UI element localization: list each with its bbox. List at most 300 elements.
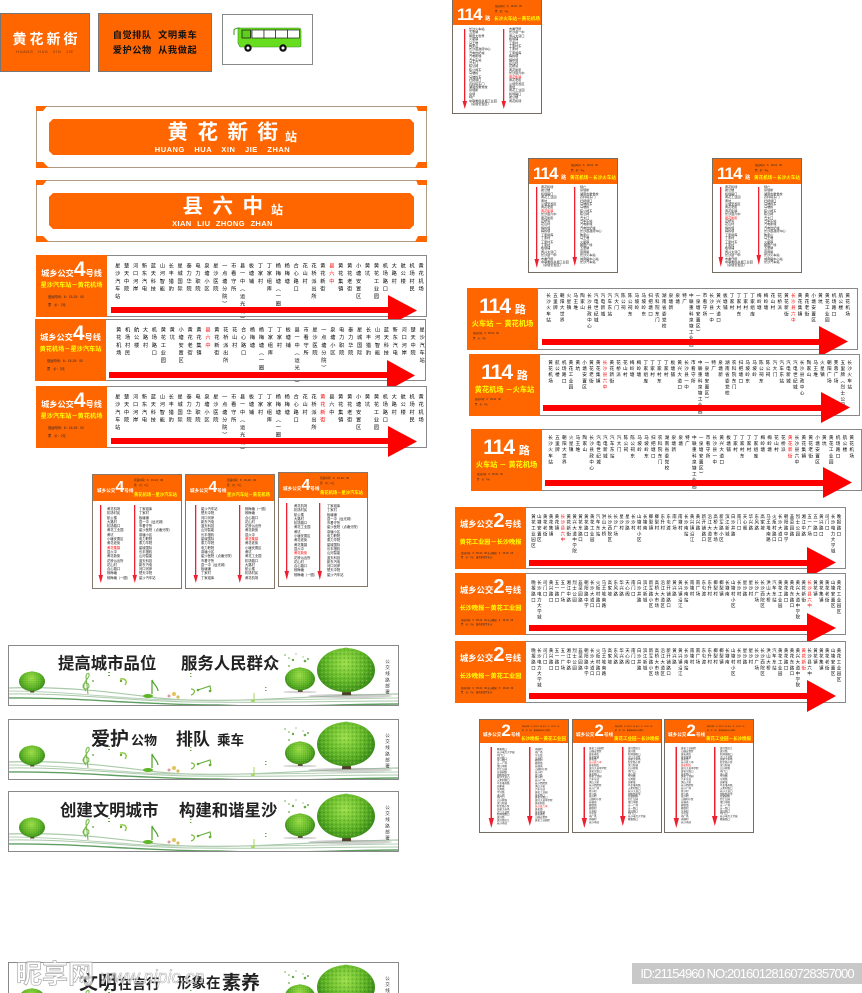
stop list: 机场路口 — [382, 394, 388, 424]
stops column 2: 长沙大道口 — [628, 790, 641, 793]
stop list: 汽电新城 — [786, 360, 791, 384]
direction: 黄花机场－星沙汽车站 — [40, 346, 101, 353]
stops column 2: 扫把塘口 — [580, 199, 592, 203]
line name: 城乡公交2号线 — [668, 721, 705, 740]
stop list: 板塘铺 — [727, 435, 732, 453]
stops column 1: 黄花集镇 — [589, 756, 599, 759]
stops column 2: 长沙村 — [535, 771, 543, 774]
stop list: 花山村 — [774, 435, 779, 453]
stop list: 河口河岸 — [132, 394, 138, 424]
fare: 票 价：2元 — [475, 404, 488, 406]
route title block — [467, 288, 538, 350]
stops column 1: 丁家组库 — [725, 233, 737, 237]
stop list: 黄坑 — [818, 293, 823, 305]
stops column 2: 蓝天科技 — [139, 559, 152, 563]
issuer text: 公交线路部署 — [386, 733, 390, 770]
stop list: 新东汽电 — [141, 263, 147, 293]
stops column 1: 五一广场 — [497, 762, 507, 765]
stops column 2: 航公楼 — [509, 95, 518, 99]
stops column 1: 黄坑 — [541, 199, 547, 203]
stops column 1: 黄坑 — [107, 533, 114, 537]
stops column 2: 高家坡 — [628, 781, 636, 784]
stops column 1: 长沙县六中 — [589, 761, 602, 764]
stop list: 韭菜园路 — [578, 580, 583, 603]
stop list: 黄兴镇沿江 — [678, 580, 683, 609]
hours and fare: 营运时间：6：05-19：00 长沙：6：15-19：00 — [522, 726, 559, 728]
stops column 2: 白沙井路 — [720, 767, 730, 770]
stop list: 黄花工业园区 — [531, 514, 536, 549]
stop list: 机场村民 — [409, 263, 415, 293]
stops column 2: 河口河岸 — [139, 567, 152, 571]
stop list: 湖南省委党校 — [725, 360, 730, 397]
stop list: 黄花工业园 — [829, 435, 834, 466]
stop list: 丁家村东 — [657, 360, 662, 384]
stop list: 山河智能 — [159, 263, 165, 293]
arrows: direction — [98, 505, 137, 583]
line name: 城乡公交4号线 — [41, 389, 102, 412]
stop list: 榔梨村 — [655, 514, 660, 531]
stop list: 机场路口 — [562, 360, 567, 384]
stop list: 南塘村 — [678, 514, 683, 531]
stop list: 市看守所 — [691, 360, 696, 384]
stop list: 电力职院 — [194, 394, 200, 424]
stop list: 长沙广场 — [614, 514, 619, 537]
stops column 1: 黄花工业园 — [541, 195, 556, 199]
stop list: 汽车东站 — [772, 648, 777, 671]
stops column 1: 高桥大市场 — [497, 808, 510, 811]
stops column 2: 梅岭塘 — [509, 58, 518, 62]
stops column 1: 南广场 — [589, 815, 597, 818]
stop list: 黄花东路口 — [790, 580, 795, 609]
stop list: 高家坡 — [608, 648, 613, 665]
hours and fare: 票 价：2元 黄花新街至长沙： — [461, 624, 494, 626]
stop list: 黄兴路口 — [819, 514, 824, 537]
stop list: 白沙井路 — [731, 514, 736, 537]
stop list: 晚报路口 — [837, 514, 842, 537]
stops column 2: 汽电新城 — [764, 222, 776, 226]
stop list: 黄花工业园 — [590, 514, 595, 543]
stop list: 星沙医院 — [212, 394, 218, 424]
stop list: 航公楼 — [400, 394, 406, 417]
stops column 2: 汽大门 — [580, 216, 589, 220]
stops column 2: 南塘村 — [535, 748, 543, 751]
stop list: 长塘南 — [725, 648, 730, 665]
hours and fare: 票 价：2元 — [571, 169, 584, 172]
stops column 2: 丁家村 — [509, 47, 518, 51]
stop list: 蓝天科技 — [150, 263, 156, 293]
stop list: 黄花新街 — [610, 360, 615, 384]
banner: public property slogan — [8, 719, 399, 780]
stop list — [114, 394, 424, 455]
stop list: 长沙西院区 — [608, 514, 613, 543]
stops column 1: 市看守所 — [541, 257, 553, 261]
stops column 2: 马王堆 — [580, 236, 589, 240]
arrow: direction — [455, 507, 846, 579]
direction: 黄花机场 －火车站 — [475, 385, 534, 394]
arrows: direction — [480, 720, 568, 832]
stops column 2: 长丰猎豹 — [327, 547, 340, 551]
stop list: 黄花老街 — [805, 293, 810, 317]
stops column 1: 梅岭塘 — [725, 226, 734, 230]
stop list: 五里牌 — [553, 293, 558, 311]
stop list: 泉塘小区 — [203, 394, 209, 424]
stop list: 榔梨镇 — [719, 648, 724, 665]
route number: 114 路 — [481, 361, 528, 384]
stops column 2: 板塘铺 — [509, 37, 518, 41]
stop list: 星城国际 — [177, 394, 183, 424]
stops column 1: 汽车东站 — [469, 58, 481, 62]
stop list: 扫把塘口 — [651, 435, 656, 459]
hours and fare: 票 价：2元 黄花新街至长沙晚报： — [522, 730, 552, 732]
stops column 1: 南塘村 — [589, 818, 597, 821]
hours: 营运时间：6：15-19：00 — [47, 359, 83, 363]
issuer text: 公交线路部署 — [386, 659, 390, 696]
stop list: 长沙电力大学城 — [537, 580, 542, 621]
stop list: 市看守所 — [230, 263, 236, 293]
stops column 2: 梅岭塘 — [509, 54, 518, 58]
watermark: image id — [632, 963, 862, 984]
route number: 114 路 — [483, 436, 530, 459]
stop list: 湘江中路 — [567, 580, 572, 603]
route panel: 114 B — [469, 354, 860, 416]
stops column 1: 长沙西院区 — [681, 784, 694, 787]
stops column 2: 星沙汽车站 — [139, 576, 155, 580]
stop list: 黄花镇 — [555, 514, 560, 531]
stops column 2: 滨江新城 — [628, 764, 638, 767]
stops column 1: 丁家组库 — [541, 233, 553, 237]
stop list: 小塘安置区 — [816, 435, 820, 466]
stop list: 长沙县一中 — [685, 360, 690, 390]
stop list — [114, 262, 424, 324]
arrows: direction — [194, 505, 242, 583]
stops column 1 — [497, 749, 515, 826]
stop list: 五一路口 — [555, 580, 560, 603]
route panel: 114 C — [471, 429, 862, 491]
hours and fare: 营运时间：6：05-19：00 长沙晚报：6：15-19：00 — [461, 620, 513, 622]
stops column 2: 五里牌 — [764, 246, 773, 250]
stops column 1: 梅岭塘 — [541, 226, 550, 230]
stops column 1: 黄花机场 — [725, 185, 737, 189]
banner: conduct slogan (cropped) — [8, 962, 399, 993]
stops column 2: 市看守所 — [139, 524, 152, 528]
stops column 2: 湘江中路 — [720, 801, 730, 804]
stops column 2: 黄花老街 — [509, 78, 521, 82]
stop list — [546, 293, 850, 348]
stop list: 梅岭塘 — [757, 293, 762, 311]
stop list: 县一中（运光城） — [239, 263, 245, 324]
stops column 1: 泉塘 — [469, 92, 475, 96]
stop list: 长沙电力大学城 — [831, 514, 836, 555]
stop list: 洪山大桥 — [766, 580, 771, 603]
stop list: 花山村 — [302, 263, 308, 286]
slogan part 2: 在言行 — [118, 976, 160, 992]
stop list: 湘江中路 — [802, 514, 807, 537]
stops column 2: 烈士公园 — [628, 798, 638, 801]
arrow: direction — [467, 288, 858, 350]
stop list: 机场路口 — [836, 435, 841, 459]
stop list: 司门口 — [543, 648, 548, 665]
stops column 2: 沿江大道区 — [628, 756, 641, 759]
stop list: 黄坑 — [576, 360, 581, 372]
hours and fare: 营运时间：6：05-19：00 长沙：6：15-19：00 — [615, 726, 652, 728]
fare: 票 价：2元 — [48, 434, 66, 438]
stop list: 火星镇 — [820, 360, 825, 378]
stop list: 马王堆南路 — [602, 580, 607, 609]
stop list: 花桥派出所 — [310, 263, 316, 301]
stops column 2: 火星镇 — [764, 240, 773, 244]
stop list: 山塘安置区 — [537, 514, 542, 543]
stops column 1: 黄兴大道中学院 — [681, 767, 699, 770]
stop list: 花山村 — [231, 327, 237, 350]
stop list: 长沙火车站 — [549, 435, 554, 466]
stop list: 合心路口 — [293, 394, 299, 424]
stops column 1 — [541, 186, 569, 268]
stops column 1: 航公楼 — [725, 188, 734, 192]
stop list: 黄兴大道中学院 — [573, 514, 578, 555]
stop list: 黄花东路口 — [790, 648, 795, 677]
stops column 1: 山塘安置区 — [589, 750, 602, 753]
hours and fare: 营运时间：6：15-19：00 — [495, 5, 522, 8]
stops column 1: 丁家村 — [725, 243, 734, 247]
stop list: 丁家村 — [733, 435, 738, 453]
stop list: 黄花新街 — [802, 580, 807, 603]
stops column 1: 黄花东路口 — [681, 770, 694, 773]
stop list: 朝阳大世界 — [560, 293, 565, 324]
stops column 2: 小塘安置区 — [509, 82, 524, 86]
stop list: 东风路 — [755, 514, 760, 531]
route panel: line 2 B — [455, 573, 846, 635]
stops column 2 — [245, 506, 268, 580]
stop list: 楚天中院 — [123, 394, 129, 424]
stops column 2: 黄花机场 — [509, 99, 521, 103]
stop list: 黄花集镇 — [802, 435, 807, 459]
line name: 城乡公交4号线 — [41, 258, 102, 281]
tile: civility slogan — [98, 13, 212, 72]
stops column 1: 长沙村 — [681, 795, 689, 798]
stop list: 杨梅塘 — [249, 327, 255, 350]
stop list: 黄花机场 — [418, 263, 424, 293]
slogan left: 提高城市品位 — [58, 655, 156, 673]
stop list: 星沙汽车站 — [419, 327, 425, 365]
stop list: 小塘安置区 — [178, 327, 184, 365]
stops column 2: 长沙电力大学城 — [628, 815, 646, 818]
stop list: 黄花集镇 — [196, 327, 202, 357]
stops column 2: 黄花东路口 — [535, 796, 548, 799]
stops column 2: 晚报路口 — [720, 818, 730, 821]
stop list: 天心阁 — [625, 580, 630, 597]
route number: 114 路 — [479, 295, 526, 318]
stops column 2: 高家坡 — [720, 781, 728, 784]
stops column 1: 长沙县六中 — [541, 212, 556, 216]
stop list: 长沙大道口 — [590, 648, 595, 677]
stops column 1: 马坡岭 — [469, 71, 478, 75]
hours and fare — [320, 476, 349, 485]
stop list: 榔梨镇 — [649, 514, 654, 531]
stop list: 黄花工业园区 — [837, 580, 842, 615]
stops column 1: 长沙南站 — [589, 821, 599, 824]
stop list: 湖南省委党校 — [665, 435, 670, 472]
stops column 1: 长沙广场 — [589, 787, 599, 790]
stop list: 芙蓉广场 — [834, 360, 839, 384]
stop list: 黄花工业园 — [778, 580, 783, 609]
stop list: 丁家村 — [730, 293, 735, 311]
stop list: 泉塘新 — [719, 360, 724, 378]
stop list: 榔梨村 — [714, 580, 719, 597]
stops column 2: 长沙广场 — [535, 779, 545, 782]
stop list: 特广 — [712, 360, 717, 372]
arrows: direction — [462, 29, 506, 109]
stops column 2: 城南路中心站 — [580, 257, 599, 261]
stops column 1: 花桥派出所 — [107, 559, 123, 563]
stops column 1: 长沙县政府中心 — [469, 47, 491, 51]
hours and fare: 营运时间：6：15-19：00 — [755, 164, 782, 167]
stops column 1: 黄花集镇 — [107, 546, 120, 550]
stops column 1: 机场村民 — [107, 511, 120, 515]
stops column 2: 火星镇 — [580, 240, 589, 244]
stops column 1: 县六中 — [294, 547, 304, 551]
card header — [279, 473, 367, 498]
stop list: 东升村 — [708, 580, 713, 597]
direction: 火车站 － 黄花机场 — [476, 460, 537, 469]
stops column 1: 华兴路 — [497, 791, 505, 794]
stops column 2: 黄花新街 — [509, 68, 521, 72]
stops column 1: 星沙村 — [589, 790, 597, 793]
stop list: 长沙县六中 — [808, 580, 813, 609]
stops column 1: 新军路小区 — [497, 805, 510, 808]
stop list: 火星镇 — [569, 435, 574, 453]
stops column 1: 大路村 — [294, 517, 304, 521]
stops column 2: 板塘铺 — [327, 513, 337, 517]
stops column 2: 汽车东站 — [535, 788, 545, 791]
line title block — [36, 386, 107, 448]
fare: 票 价：2元 — [48, 303, 66, 307]
stops column 1: 火星镇 — [469, 37, 478, 41]
stops column 1: 机场路口 — [725, 192, 737, 196]
stop list: 航公楼 — [133, 327, 139, 350]
line name: 城乡公交4号线 — [283, 477, 320, 494]
fare: 票 价：2元 — [477, 479, 490, 481]
stops column 1: 小塘安置区 — [725, 202, 740, 206]
stop list: 丁家组库 — [266, 263, 272, 293]
stop card: 114 B — [528, 158, 618, 273]
stops column 1: 板塘铺 — [541, 246, 550, 250]
stop list: 丁家村 — [257, 263, 263, 286]
stops column 1: 县六中 — [107, 550, 117, 554]
stops column 2: 韭菜园路 — [720, 795, 730, 798]
stop list: 丁家村东 — [740, 435, 745, 459]
slogan left small: 公物 — [131, 733, 157, 748]
stop list: 马王堆 — [814, 360, 819, 378]
stop list: 火炬村路口 — [596, 648, 601, 677]
stop list: 黄兴大道中学院 — [796, 580, 801, 621]
stop list: 梅岭塘 — [637, 360, 642, 378]
stops column 2 — [509, 27, 524, 103]
stops column 2: 机场村民 — [245, 571, 258, 575]
stops column 1: 长沙县六中 — [725, 212, 740, 216]
stop list: 马王堆 — [576, 435, 581, 453]
stop list: 马王堆南路 — [602, 648, 607, 677]
stop list: 新军路小区 — [649, 648, 654, 677]
stop list: 黄坑 — [364, 263, 370, 278]
stops column 2: 黄兴路口 — [720, 810, 730, 813]
stops column 1: 榔梨镇 — [589, 804, 597, 807]
stops column 2: 湖南省委党校 — [764, 192, 783, 196]
stops column 1: 泉塘新 — [469, 88, 478, 92]
banner: civilised city slogan — [8, 791, 399, 852]
stop list: 长丰猎豹 — [365, 327, 371, 357]
fare: 票 价：2元 — [473, 338, 486, 340]
stop list: 五一广场 — [808, 514, 813, 537]
stop list: 杨梅塘（一圈） — [258, 327, 264, 380]
stop card: line 4 B — [185, 474, 275, 589]
stops column 2: 楚天中院 — [327, 568, 340, 572]
stops column 1: 黄花工业园区 — [589, 747, 604, 750]
hours and fare — [461, 620, 513, 627]
issuer text: 公交线路部署 — [386, 805, 390, 842]
stops column 1: 黄兴大道中学院 — [589, 767, 607, 770]
stops column 2: 农科院东门 — [764, 195, 779, 199]
stop list: 山塘安置区 — [831, 580, 836, 609]
stop list: 小塘安置区 — [583, 360, 588, 390]
stops column 2: 马坡岭 — [764, 205, 773, 209]
stop list: 湖南省委党校 — [662, 293, 667, 330]
stops column 1: 马坡岭东 — [469, 75, 481, 79]
stops column 2: 五一路口 — [720, 807, 730, 810]
stops column 1: 黄花老街 — [681, 753, 691, 756]
line title block — [455, 507, 526, 569]
stops column 1: 黄坑 — [294, 530, 301, 534]
icon: green bus — [234, 28, 302, 52]
stop list: 新东汽电 — [392, 327, 398, 357]
slogan text: 自觉排队 文明乘车 爱护公物 从我做起 — [113, 30, 197, 54]
stops column 1: 长沙村 — [589, 795, 597, 798]
stop list: 汽电世纪城 — [793, 360, 798, 390]
stops column 2: 黄花机场 — [245, 576, 258, 580]
stops column 2: 司门口 — [720, 812, 728, 815]
stops column 1: 五里牌 — [469, 30, 478, 34]
stops column 2: 东屯渡 — [535, 754, 543, 757]
stops column 1: 黄兴路口 — [497, 757, 507, 760]
stops column 1: 马王堆 — [469, 41, 478, 45]
stop list: 蓝天科技 — [150, 394, 156, 424]
stop list: 黄花新街 — [319, 263, 325, 293]
stop list: 新开铺路口 — [702, 514, 707, 543]
stop list: 马坡岭东 — [642, 293, 647, 317]
stop list: 长沙村 — [737, 580, 742, 597]
route panel: line 2 C — [455, 641, 846, 703]
stops column 2: 陈公祠东 — [764, 209, 776, 213]
stop list: 县六中 — [328, 394, 334, 417]
stop list: 丁家村 — [747, 435, 752, 453]
stop list: 航公楼 — [843, 435, 848, 453]
stop list: 山河智能 — [374, 327, 380, 357]
sign frame and plate — [36, 106, 427, 168]
route number: 114 路 — [457, 5, 490, 24]
stops column 2: 丁家组库 — [327, 504, 340, 508]
stop list: 花桥派 — [617, 360, 622, 378]
stop list: 星沙汽车站 — [114, 394, 120, 432]
stop list: 星沙汽车站 — [114, 263, 120, 301]
stops column 2: 汽电世纪城 — [764, 226, 779, 230]
stops column 2: 电力职院 — [327, 534, 340, 538]
stops column 2: 东风路 — [628, 778, 636, 781]
stop list: 大路村 — [391, 394, 397, 417]
stop list: 五一广场 — [561, 580, 566, 603]
stops column 2: 火炬村路口 — [628, 787, 641, 790]
stops column 2: 陈公祠 — [764, 212, 773, 216]
stops column 1: 机场村民 — [294, 508, 307, 512]
stops column 1: 陈公祠 — [469, 64, 478, 68]
